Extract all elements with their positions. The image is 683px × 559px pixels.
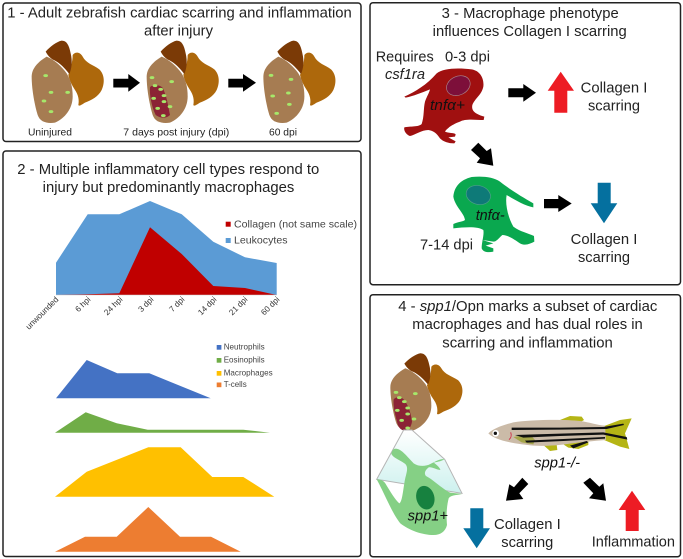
text: collagen I scarring down: [571, 232, 637, 266]
icon: uninjured heart: [32, 41, 104, 123]
text: collagen I scarring up: Collagen I: [581, 80, 647, 96]
icon: red macrophage: [404, 69, 484, 143]
heading: panel 1: after injury: [144, 24, 214, 40]
legend: cell types: T-cells: [224, 380, 247, 389]
heading: panel 4: scarring and inflammation: [442, 336, 613, 352]
panel 1: zebrafish cardiac scarring: [3, 3, 361, 142]
heading: panel 1: [7, 6, 352, 40]
icon: green macrophage: [453, 177, 534, 252]
text: collagen I scarring: Collagen I: [494, 517, 561, 533]
heading: panel 2: [17, 162, 319, 196]
text: collagen I scarring up: scarring: [588, 98, 640, 114]
axis labels: 21 dpi: [227, 295, 250, 317]
text: collagen I scarring: scarring: [501, 535, 553, 551]
area chart: macrophages: [55, 447, 274, 497]
arrow: red up: [619, 491, 645, 531]
label: tnfa+: tnfα+: [430, 98, 465, 114]
text: collagen I scarring up: [581, 80, 647, 114]
label: csf1ra: csf1ra: [385, 67, 425, 83]
label: requires: Requires: [376, 50, 434, 66]
label: spp1-/-: spp1-/-: [534, 456, 580, 472]
heading: panel 1: 1 - Adult zebrafish cardiac scarring and inflammation: [7, 6, 352, 22]
arrow: 7 dpi to 60 dpi: [228, 74, 256, 92]
axis labels: 6 hpi: [73, 295, 93, 314]
caption: uninjured: Uninjured: [28, 126, 72, 138]
panel 4: spp1: [370, 295, 680, 557]
area chart: T-cells: [55, 507, 241, 552]
legend: cell types: [217, 342, 273, 389]
area chart: leukocytes and collagen: [24, 201, 282, 331]
arrow: red up: [548, 72, 574, 113]
label: 7-14 dpi: 7-14 dpi: [420, 238, 473, 254]
text: collagen I scarring down: scarring: [578, 250, 630, 266]
area chart: eosinophils: [55, 412, 270, 433]
label: tnfa-: tnfα-: [476, 208, 505, 224]
label: 0-3 dpi: 0-3 dpi: [445, 50, 490, 66]
arrow: to increased inflammation: [583, 478, 606, 501]
callout: magnified spp1+ macrophage: [377, 430, 462, 535]
heading: panel 4: macrophages and has dual roles in: [412, 317, 643, 333]
caption: 60 dpi: 60 dpi: [269, 126, 297, 138]
panel 3: macrophage phenotype: [370, 3, 680, 285]
arrow: uninjured to 7 dpi: [113, 74, 140, 92]
arrow: red to green macrophage: [471, 143, 493, 166]
heading: panel 4: [398, 299, 657, 352]
arrow: to decreased collagen: [506, 478, 528, 501]
icon: injured heart with zoom callout: [377, 353, 462, 535]
caption: 7 dpi: 7 days post injury (dpi): [123, 126, 229, 138]
heading: panel 2: 2 - Multiple inflammatory cell types respond to: [17, 162, 319, 178]
arrow: to increased collagen: [508, 84, 536, 102]
axis labels: unwounded: [24, 295, 61, 331]
text: collagen I scarring: [494, 517, 561, 551]
axis labels: 24 hpi: [102, 295, 125, 317]
heading: panel 4: 4 - spp1/Opn marks a subset of cardiac: [398, 299, 657, 315]
arrow: blue down: [591, 183, 617, 223]
icon: healed heart at 60 dpi: [263, 41, 335, 123]
axis labels: 60 dpi: [259, 295, 282, 317]
text: inflammation: Inflammation: [592, 534, 675, 550]
icon: zebrafish: [488, 416, 632, 451]
legend: cell types: Macrophages: [224, 368, 273, 378]
text: collagen I scarring down: Collagen I: [571, 232, 637, 248]
legend: collagen and leukocytes: [226, 218, 357, 246]
area chart: neutrophils: [56, 360, 211, 398]
legend: cell types: Neutrophils: [224, 342, 265, 352]
axis labels: 7 dpi: [167, 295, 187, 314]
arrow: to decreased collagen: [544, 195, 572, 212]
axis labels: 3 dpi: [136, 295, 156, 314]
heading: panel 3: [433, 6, 627, 40]
panel 2: inflammatory cell types: [3, 151, 361, 556]
icon: injured heart at 7 dpi: [147, 41, 219, 123]
heading: panel 3: influences Collagen I scarring: [433, 24, 627, 40]
heading: panel 2: injury but predominantly macrophages: [43, 180, 294, 196]
label: spp1+: spp1+: [408, 509, 448, 525]
legend: collagen and leukocytes: Collagen (not same scale): [234, 218, 357, 230]
arrow: blue down: [463, 508, 490, 548]
legend: cell types: Eosinophils: [224, 356, 265, 364]
legend: collagen and leukocytes: Leukocytes: [234, 234, 288, 246]
axis labels: 14 dpi: [196, 295, 219, 317]
axis labels: [24, 295, 282, 331]
heading: panel 3: 3 - Macrophage phenotype: [442, 6, 619, 22]
